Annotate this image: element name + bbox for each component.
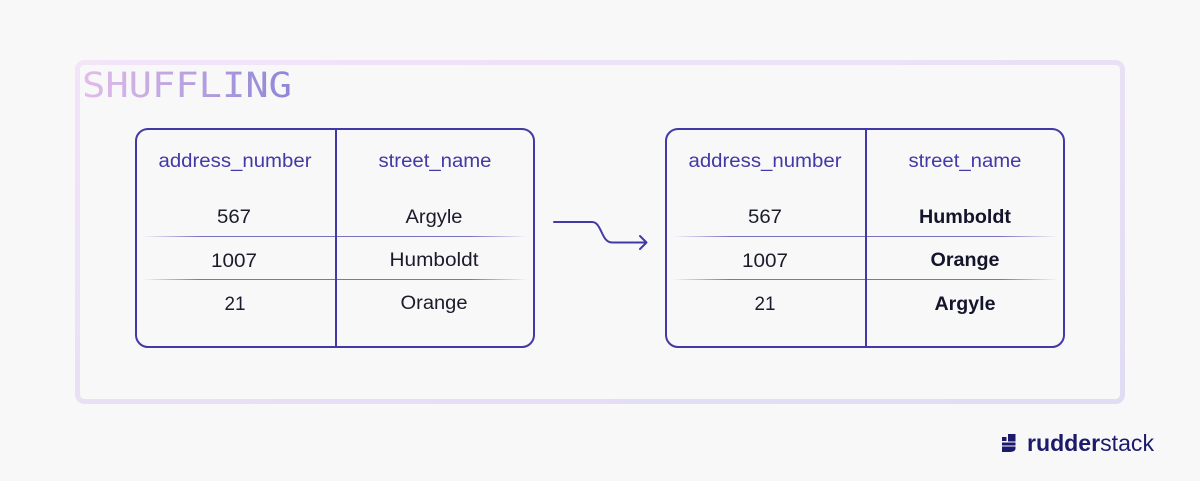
table: before shuffling: Argyle	[406, 207, 462, 228]
table: before shuffling: Orange	[400, 293, 468, 314]
table: before shuffling: 1007	[211, 251, 257, 272]
table: after shuffling	[666, 129, 1064, 347]
table: after shuffling: 567	[748, 207, 782, 228]
table: after shuffling: 1007	[742, 251, 788, 272]
table: before shuffling: 567	[217, 207, 251, 228]
table: after shuffling: address_number	[688, 151, 842, 172]
table: before shuffling	[136, 129, 534, 347]
table: before shuffling: Humboldt	[390, 250, 479, 271]
table: after shuffling: 21	[754, 294, 776, 315]
icon: rudderstack ship	[1002, 434, 1016, 452]
logo: rudderstack	[1002, 430, 1154, 456]
panel: shuffling frame	[78, 62, 1122, 402]
table: before shuffling: 21	[224, 294, 246, 315]
table: after shuffling: Argyle	[934, 294, 996, 315]
table: after shuffling: Humboldt	[919, 207, 1012, 228]
table: before shuffling: address_number	[158, 151, 312, 172]
title: SHUFFLING: SHUFFLING	[82, 66, 292, 106]
table: before shuffling: street_name	[378, 151, 492, 172]
table: after shuffling: Orange	[930, 250, 1000, 271]
table: after shuffling: street_name	[908, 151, 1022, 172]
arrow: shuffle direction	[554, 222, 646, 249]
wordmark: rudderstack	[1027, 430, 1154, 456]
